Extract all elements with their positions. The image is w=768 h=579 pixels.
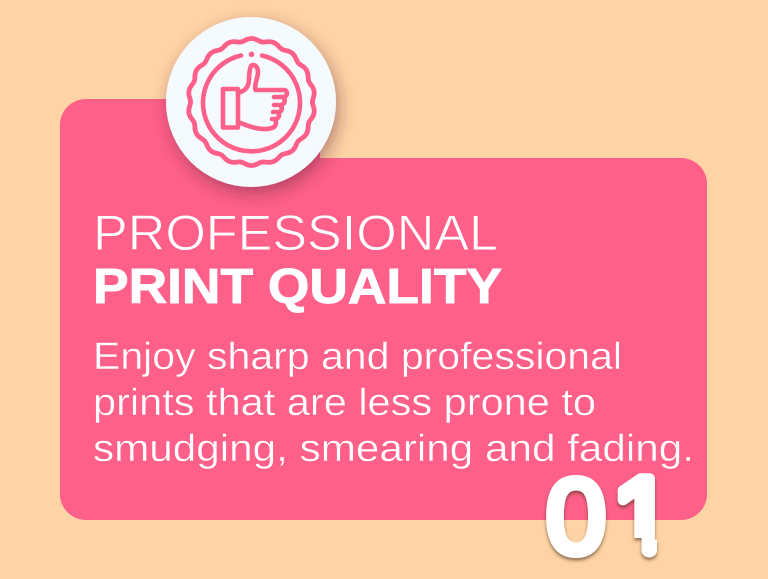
icon: ring dot bbox=[249, 52, 254, 57]
text block: description: Enjoy sharp and professional bbox=[93, 336, 622, 378]
number: 01: 1 bbox=[613, 455, 673, 576]
text block: description: smudging, smearing and fading. bbox=[93, 428, 694, 470]
icon: inner ring with gap at top bbox=[203, 56, 300, 151]
number: 01: 0 bbox=[546, 458, 606, 576]
number: 01 bbox=[544, 473, 660, 563]
text block: description: prints that are less prone to bbox=[93, 382, 596, 424]
icon: thumbs up hand bbox=[223, 65, 287, 129]
badge: white circle with thumbs up icon bbox=[166, 17, 336, 187]
heading: professional: PROFESSIONAL bbox=[93, 205, 498, 261]
icon: wavy seal outline bbox=[187, 38, 316, 166]
text block: description bbox=[93, 336, 694, 470]
panel: pink card bbox=[60, 99, 707, 520]
heading: print quality: PRINT QUALITY bbox=[93, 260, 502, 314]
